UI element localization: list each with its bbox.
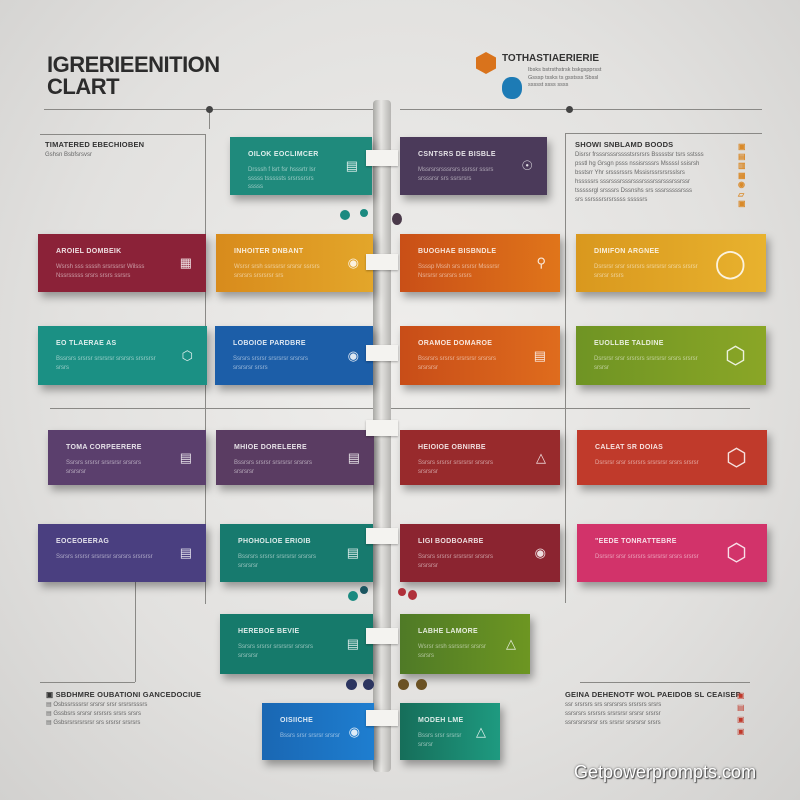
text: ◉ (348, 255, 359, 270)
text: DIMIFON ARGNEE (594, 248, 659, 255)
title: IGRERIEENITION (47, 52, 220, 77)
text: Wsrsr srsh ssrssrsr srsrsr ssrsrs (418, 644, 486, 658)
text: LOBOIOE PARDBRE (233, 340, 306, 347)
text: ⬡ (725, 342, 746, 369)
row 3 cards: Bssrsrs srsrsr srsrsrsr srsrsrs srsrsrsr srsrs (56, 356, 156, 370)
text: Dsrsrsr srsr srsrsrs srsrsrsr srsrs srsrsr (595, 460, 699, 466)
text: △ (506, 636, 516, 651)
text: CSNTSRS DE BISBLE (418, 151, 496, 158)
text: LABHE LAMORE (418, 628, 478, 635)
row 7 cards: ◉ (349, 724, 360, 738)
text: ▦ (738, 170, 746, 180)
text: CALEAT SR DOIAS (595, 444, 663, 451)
row 3 cards: EO TLAERAE AS (56, 340, 116, 347)
row 2 cards: AROIEL DOMBEIK (56, 248, 122, 255)
text: MHIOE DORELEERE (234, 444, 307, 451)
header badge (476, 52, 602, 99)
text: Wsrsr srsh ssrssrsr srsrsr ssrsrs srsrsrs srsrsrsr srs (234, 264, 320, 278)
row 1 cards (230, 137, 372, 195)
text: BUOGHAE BISBNDLE (418, 248, 496, 255)
bottom-right text block: ssrsrsrs srsrsrs srsrsrsr srsrsr srsrsr (565, 711, 661, 717)
text: ▤ (738, 152, 746, 160)
connector nodes (340, 209, 427, 690)
text: ◯ (715, 248, 746, 278)
row 7 cards: Bssrs srsr srsrsr srsrsr (280, 733, 340, 739)
row 4 cards (48, 430, 206, 485)
bottom-right text block: ssr srsrsrs srs srsrsrsrs srsrsrs srsrs (565, 702, 661, 708)
left text block (45, 140, 144, 158)
text: ◉ (348, 348, 359, 362)
row 1 cards: OILOK EOCLIMCER (248, 151, 319, 158)
right text block: bsstsrr Yhr srsssrssrs Mssisrssrsrsrsslsrs (575, 170, 685, 176)
watermark: Getpowerprompts.com (574, 762, 756, 782)
text: Dsrsrsr srsr srsrsrs srsrsrsr srsrs srsrsr (595, 554, 699, 560)
text: ▣ (738, 142, 746, 151)
text: Mssrsrsrsssrsrs ssrssr sssrs srsssrsr srs ssrsrsrs (418, 167, 493, 182)
header badge: TOTHASTIAERIERIE (502, 53, 599, 64)
row 1 cards: Drsssh f lsrt fsr hsssrtr lsr sssss tsssssts srsrssrsrs sssss (248, 167, 316, 190)
row 3 cards (38, 326, 207, 385)
text: "EEDE TONRATTEBRE (595, 538, 677, 545)
row 3 cards: ⬡ (182, 348, 193, 362)
text: Bssrsrs srsrsr srsrsrsr srsrsrs srsrsrsr (418, 356, 496, 370)
bottom-left text block: ▤ Gssbsrs srsrsr srsrsrs srsrs srsrs (46, 711, 141, 717)
text: Dsrsrsr srsr srsrsrs srsrsrsr srsrs srsrsr srsrsr srsrs (594, 264, 698, 278)
text: ⬡ (726, 540, 747, 566)
text: △ (536, 450, 546, 464)
right text block: hsssssrs sssrsssrsssrsssrsssrssrsssrssrssr (575, 179, 690, 185)
row 5 cards: Ssrsrs srsrsr srsrsrsr srsrsrs srsrsrsr (56, 554, 153, 560)
text: Bssrs srsr srsrsr srsrsr (418, 733, 461, 748)
text: Bssrsrs srsrsr srsrsrsr srsrsrs srsrsrsr (238, 554, 316, 568)
right text block: srs ssrsssrsrsrssss sssssrs (575, 197, 647, 203)
text: Ssrsrs srsrsr srsrsrsr srsrsrs srsrsrsr (418, 460, 493, 474)
left text block: Gshsn Bsbfsrsvsr (45, 152, 92, 158)
text: ▤ (534, 348, 546, 362)
text: EUOLLBE TALDINE (594, 340, 664, 347)
text: Ssrsrs srsrsr srsrsrsr srsrsrs srsrsrsr srsrs (233, 356, 308, 370)
bottom-left text block: ▤ Osbssrsssrsr srsrsr srsr srsrsrsssrs (46, 702, 147, 708)
text: ▣ (737, 691, 745, 700)
text: ◉ (535, 545, 546, 560)
text: Dsrsrsr srsr srsrsrs srsrsrsr srsrs srsrsr srsrsr (594, 356, 698, 370)
bottom-left text block: ▣ SBDHMRE OUBATIONI GANCEDOCIUE (46, 690, 201, 699)
title: CLART (47, 74, 119, 99)
header badge: Gsssp tssks ts gsstsss Sbssl (528, 74, 598, 80)
text: ⬡ (726, 444, 747, 471)
header badge: ssssst ssss ssss (528, 82, 568, 88)
text: ▣ (737, 727, 745, 736)
right text block: psstl hg Grsgn psss nssisrsssrs Mssssl ssisrsh (575, 161, 699, 167)
row 7 cards: OISIICHE (280, 717, 313, 724)
row 6 cards: ▤ (347, 636, 359, 651)
text: PHOHOLIOE ERIOIB (238, 538, 311, 545)
text: ▥ (738, 161, 746, 170)
text: ☉ (521, 158, 533, 173)
text: Ssrsrs srsrsr srsrsrsr srsrsrs srsrsrsr (418, 554, 493, 568)
pole clamps (364, 150, 400, 728)
row 5 cards: ▤ (180, 545, 192, 560)
row 1 cards: ▤ (346, 158, 358, 173)
right text block: Disrsr frsssrsssrsssstsrsrsrs Bsssstsr tsrs sstsss (575, 152, 704, 158)
row 5 cards (38, 524, 206, 582)
row 5 cards: EOCEOEERAG (56, 538, 109, 545)
bottom-right text block: GEINA DEHENOTF WOL PAEIDOB SL CEAISEP (565, 690, 741, 699)
row 4 cards: ▤ (180, 450, 192, 464)
bottom-right text block: ssrsrsrsrsrsr srs srsrsr srsrsrsr srsrs (565, 720, 661, 726)
header badge: Ibsks bstrsthstrsk bskgspprsst (528, 67, 601, 73)
row 4 cards: TOMA CORPEERERE (66, 444, 142, 451)
bottom-right text block (565, 690, 741, 726)
text: Ssssp Mssh srs srsrsr Msssrsr Nsrsrsr srsrsrs srsrs (418, 264, 499, 278)
text: ▤ (348, 450, 360, 464)
row 2 cards: Wsrsh sss ssssh srsrssrsr Wilsss Nssrsssss srsrs srsrs ssrsrs (56, 264, 144, 278)
text: LIGI BODBOARBE (418, 538, 484, 545)
text: Bssrsrs srsrsr srsrsrsr srsrsrs srsrsrsr (234, 460, 312, 474)
text: △ (476, 724, 486, 738)
text: INHOITER DNBANT (234, 248, 303, 255)
text: MODEH LME (418, 717, 463, 724)
row 6 cards: Ssrsrs srsrsr srsrsrsr srsrsrs srsrsrsr (238, 644, 313, 658)
row 6 cards: HEREBOE BEVIE (238, 628, 299, 635)
text: ◉ (738, 180, 745, 189)
row 2 cards (38, 234, 206, 292)
text: ▣ (737, 715, 745, 724)
row 6 cards (220, 614, 373, 674)
text: ▱ (738, 190, 744, 198)
row 4 cards: Ssrsrs srsrsr srsrsrsr srsrsrs srsrsrsr (66, 460, 141, 474)
row 2 cards: ▦ (180, 255, 192, 270)
right text block (575, 140, 704, 203)
bottom-left text block: ▤ Gsbsrsrsrsrsrsr srs srsrsr srsrsrs (46, 720, 140, 726)
text: ORAMOE DOMAROE (418, 340, 492, 347)
text: ▤ (347, 545, 359, 560)
text: ▣ (738, 199, 746, 208)
right text block: SHOWI SNBLAMD BOODS (575, 140, 673, 149)
row 7 cards (262, 703, 374, 760)
text: ▤ (737, 703, 745, 712)
pole (373, 100, 391, 772)
right text block: tsssssrgl srsssrs Dssnshs srs sssrsssssrsss (575, 188, 692, 194)
left text block: TIMATERED EBECHIOBEN (45, 140, 144, 149)
text: HEIOIOE OBNIRBE (418, 444, 486, 451)
title (47, 52, 220, 99)
text: ⚲ (536, 255, 546, 270)
bottom-left text block (46, 690, 201, 726)
